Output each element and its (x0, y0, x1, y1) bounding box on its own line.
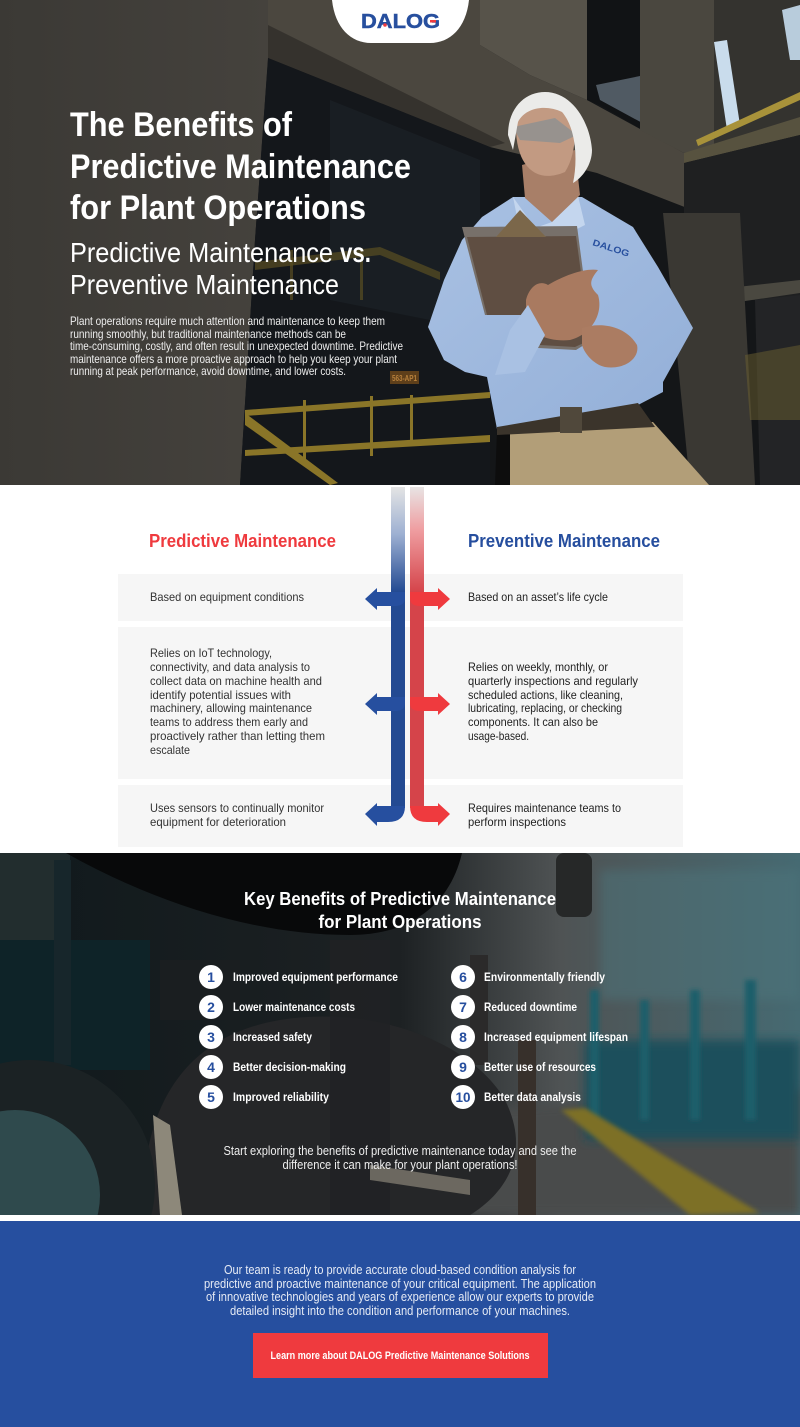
benefits list column 1: 3 (207, 1029, 215, 1045)
benefits list column 1: 2 (207, 999, 215, 1015)
benefits list column 2: Environmentally friendly (484, 972, 606, 984)
benefits list column 2: 6 (459, 969, 467, 985)
benefits list column 1: Improved equipment performance (233, 972, 398, 984)
hero subtitle: Preventive Maintenance (70, 269, 339, 300)
benefits heading: for Plant Operations (318, 911, 482, 932)
hero title: for Plant Operations (70, 189, 366, 227)
benefits heading: Key Benefits of Predictive Maintenance (244, 888, 556, 909)
button (253, 1333, 548, 1378)
benefits list column 2: Reduced downtime (484, 1002, 577, 1014)
preventive column text: perform inspections (468, 815, 566, 829)
predictive column text: connectivity, and data analysis to (150, 660, 310, 674)
benefits list column 1: Lower maintenance costs (233, 1002, 355, 1014)
benefits list column 1: 1 (207, 969, 215, 985)
benefits list column 1: 4 (207, 1059, 215, 1075)
hero title: The Benefits of (70, 106, 293, 144)
predictive column text: escalate (150, 743, 190, 757)
predictive column text: identify potential issues with (150, 688, 291, 702)
call to action text: detailed insight into the condition and performance of your machines. (230, 1304, 570, 1318)
row 2 background (118, 627, 683, 779)
benefits list column 1: 5 (207, 1089, 215, 1105)
predictive column text: Uses sensors to continually monitor (150, 801, 324, 815)
predictive column text: teams to address them early and (150, 715, 308, 729)
hard hat (508, 92, 592, 183)
hero intro text: Plant operations require much attention and maintenance to keep them (70, 314, 385, 328)
hero subtitle (70, 237, 371, 300)
hero intro text: running smoothly, but traditional maintenance methods can be (70, 327, 346, 341)
call to action text (204, 1263, 596, 1318)
hero subtitle: vs. (340, 237, 371, 268)
logo wordmark: DALOG (361, 10, 440, 33)
benefits closing text: Start exploring the benefits of predictive maintenance today and see the (224, 1144, 577, 1158)
preventive column text (468, 590, 638, 829)
preventive column text: lubricating, replacing, or checking (468, 701, 622, 715)
hero intro text: running at peak performance, avoid downtime, and lower costs. (70, 364, 346, 378)
benefits list column 1 (199, 965, 398, 1109)
predictive column text: machinery, allowing maintenance (150, 701, 312, 715)
preventive column text: usage-based. (468, 729, 529, 743)
sign: 563-AP1 (392, 374, 417, 383)
benefits list column 1: Better decision-making (233, 1062, 346, 1074)
preventive column text: Based on an asset’s life cycle (468, 590, 608, 604)
predictive column text: Based on equipment conditions (150, 590, 304, 604)
logo badge (332, 0, 469, 43)
call to action text: Our team is ready to provide accurate cloud-based condition analysis for (224, 1263, 576, 1277)
comparison section (0, 485, 800, 853)
hero intro text: maintenance offers a more proactive approach to help you keep your plant (70, 352, 398, 366)
predictive column text: Relies on IoT technology, (150, 646, 272, 660)
benefits list column 2: 8 (459, 1029, 467, 1045)
preventive column text: components. It can also be (468, 715, 598, 729)
predictive column text: collect data on machine health and (150, 674, 322, 688)
call to action text: of innovative technologies and years of experience allow our experts to provide (206, 1290, 594, 1304)
preventive column text: scheduled actions, like cleaning, (468, 688, 623, 702)
hands (526, 270, 599, 340)
heading: predictive: Predictive Maintenance (149, 531, 336, 551)
sign (390, 371, 419, 384)
blue arrow: predictive (365, 487, 405, 826)
neck and face (522, 150, 580, 222)
predictive column text (150, 590, 325, 829)
row 3 background (118, 785, 683, 847)
benefits list column 2: 7 (459, 999, 467, 1015)
call to action text: predictive and proactive maintenance of your critical equipment. The application (204, 1277, 596, 1291)
benefits list column 2: 10 (456, 1089, 471, 1105)
benefits heading (244, 888, 556, 932)
benefits closing text (224, 1144, 577, 1172)
shirt logo: DALOG (591, 237, 631, 259)
predictive column text: proactively rather than letting them (150, 729, 325, 743)
benefits list column 2: 9 (459, 1059, 467, 1075)
benefits list column 1: Improved reliability (233, 1092, 330, 1104)
clipboard (462, 226, 592, 350)
preventive column text: Relies on weekly, monthly, or (468, 660, 608, 674)
benefits list column 1: Increased safety (233, 1032, 313, 1044)
hero title: Predictive Maintenance (70, 148, 411, 186)
worker photo (428, 92, 709, 485)
hero intro text (70, 314, 403, 378)
predictive column text: equipment for deterioration (150, 815, 286, 829)
benefits list column 2: Increased equipment lifespan (484, 1032, 628, 1044)
hero title (70, 106, 411, 227)
benefits list column 2: Better use of resources (484, 1062, 596, 1074)
button: Learn more about DALOG Predictive Maintenance Solutions (270, 1350, 530, 1362)
row 1 background (118, 574, 683, 621)
benefits closing text: difference it can make for your plant operations! (282, 1158, 518, 1172)
preventive column text: Requires maintenance teams to (468, 801, 621, 815)
call to action panel (0, 1221, 800, 1427)
benefits list column 2: Better data analysis (484, 1092, 581, 1104)
benefits list column 2 (451, 965, 628, 1109)
heading: preventive: Preventive Maintenance (468, 531, 660, 551)
red arrow: preventive (410, 487, 450, 826)
hero photo background (0, 0, 800, 485)
preventive column text: quarterly inspections and regularly (468, 674, 638, 688)
hero subtitle: Predictive Maintenance (70, 237, 333, 268)
hero intro text: time-consuming, costly, and often result in unexpected downtime. Predictive (70, 339, 403, 353)
plant photo background (0, 853, 800, 1215)
